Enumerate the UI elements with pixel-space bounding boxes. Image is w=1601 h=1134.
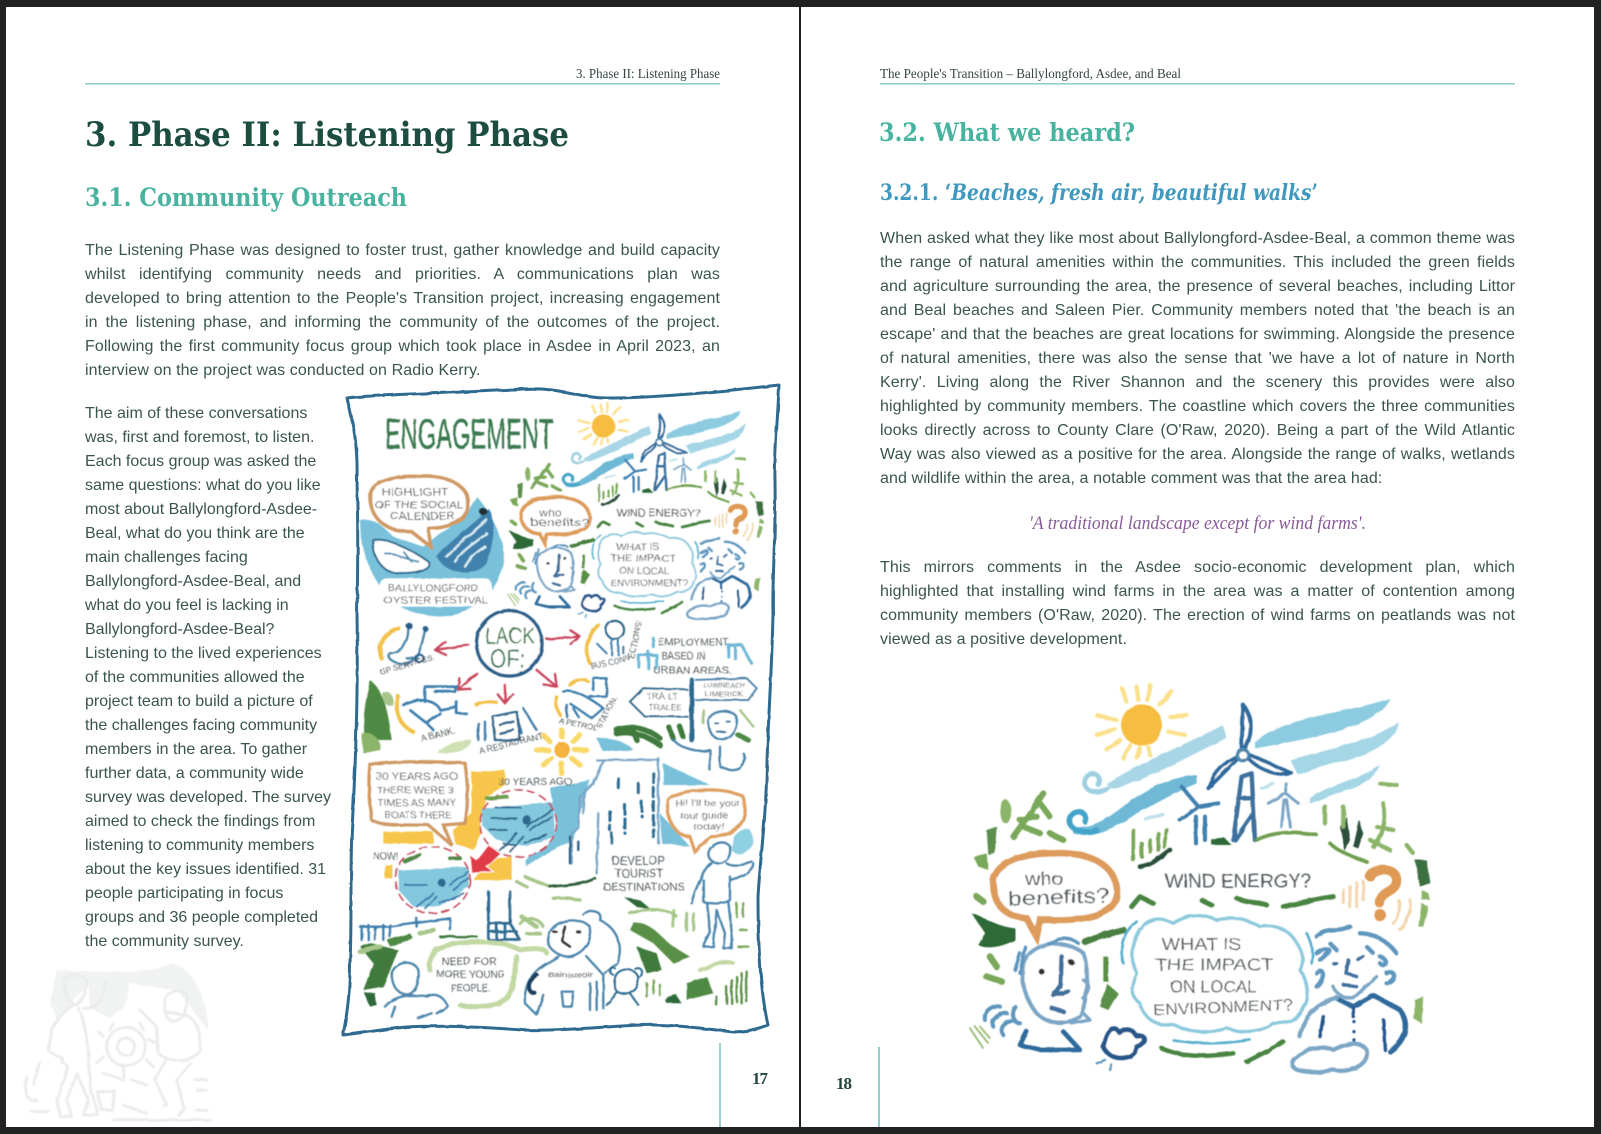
poster background washes — [360, 733, 753, 990]
employment in urban areas: EMPLOYMENT — [658, 638, 729, 649]
icon: bank — [364, 680, 467, 740]
tour guide figure — [692, 842, 753, 948]
oyster festival vignette: OF THE SOCIAL — [375, 499, 463, 511]
body column: aim of conversations: members in the area. To gather — [85, 741, 307, 758]
title: 3. Phase II: Listening Phase — [85, 115, 569, 155]
body paragraph: natural amenities: and Beal beaches and Saleen Pier. Community members noted that 'the beach is an — [880, 302, 1515, 319]
body paragraph: natural amenities: Kerry'. Living along the River Shannon and the scenery this provides were also — [880, 374, 1515, 391]
body column: aim of conversations: listening to community members — [85, 837, 314, 854]
pull quote: 'A traditional landscape except for wind farms'. — [1029, 514, 1366, 534]
thought cloud label: ENVIRONMENT? — [1153, 997, 1294, 1019]
thought cloud label: THE IMPACT — [1155, 955, 1273, 975]
body paragraph: listening phase: The Listening Phase was designed to foster trust, gather knowledge and build capacity — [85, 242, 720, 259]
upper wind energy vignette — [508, 404, 764, 619]
page header: left: 3. Phase II: Listening Phase — [576, 66, 720, 81]
body column: aim of conversations — [85, 405, 331, 950]
speech bubble: 30 years ago: TIMES AS MANY — [377, 798, 457, 809]
label: develop tourist destinations: TOURIST — [615, 866, 664, 880]
body column: aim of conversations: was, first and foremost, to listen. — [85, 429, 314, 446]
body paragraph: wind farms contention: viewed as a positive development. — [880, 631, 1127, 648]
poster upper half: WIND ENERGY? — [617, 508, 701, 520]
poster upper half: ENVIRONMENT? — [611, 578, 688, 588]
oyster festival vignette: BALLYLONGFORD — [388, 584, 478, 595]
speech bubble: tour guide: tour guide — [680, 810, 728, 820]
body paragraph: natural amenities — [880, 230, 1515, 487]
label: develop tourist destinations — [603, 853, 685, 894]
icon: bus connections: ECTIONS! — [626, 619, 644, 660]
body column: aim of conversations: The aim of these conversations — [85, 405, 307, 422]
body column: aim of conversations: aimed to check the findings from — [85, 813, 315, 830]
employment in urban areas: URBAN AREAS. — [653, 665, 732, 676]
heading: community outreach: 3.1. Community Outreach — [85, 183, 407, 212]
body paragraph: natural amenities: Way was also viewed as a positive for the area. Alongside the range of walks, wetlands — [880, 446, 1515, 463]
need more young people: NEED FOR — [442, 956, 497, 968]
page rule — [878, 1047, 880, 1127]
harbour and bridge — [360, 892, 520, 940]
icon: petrol station: STATION. — [594, 694, 619, 730]
body column: aim of conversations: Listening to the lived experiences — [85, 645, 322, 662]
then: dashed harbour scene — [480, 790, 557, 857]
icon: wind turbines — [1180, 705, 1298, 843]
bushes beside the signpost — [617, 727, 683, 740]
body column: aim of conversations: main challenges facing — [85, 549, 248, 566]
signpost person — [703, 710, 753, 739]
body paragraph: listening phase: developed to bring attention to the People's Transition project, increasing engagement — [85, 290, 720, 307]
body paragraph: natural amenities: of natural amenities, there was also the sense that 'we have a lot of nature in North — [880, 350, 1515, 367]
thought cloud label: WHAT IS — [1162, 934, 1242, 954]
poster upper half — [360, 404, 764, 740]
need more young people — [429, 942, 547, 1007]
thought cloud — [1122, 916, 1313, 1043]
icon: bus connections: BUS CONN — [590, 653, 631, 671]
body column: aim of conversations: Ballylongford-Asdee-Beal, and — [85, 573, 301, 590]
body paragraph: listening phase: whilst identifying community needs and priorities. A communications plan was — [85, 266, 720, 283]
body paragraph: natural amenities: escape' and that the beaches are great locations for swimming. Alongside the presence — [880, 326, 1515, 343]
signpost — [630, 678, 757, 740]
heading: beaches fresh air beautiful walks: 3.2.1. ‘Beaches, fresh air, beautiful walks’ — [880, 180, 1318, 206]
wind energy label: WIND ENERGY? — [1165, 871, 1312, 892]
body column: aim of conversations: about the key issues identified. 31 — [85, 861, 326, 878]
body paragraph: listening phase: interview on the project was conducted on Radio Kerry. — [85, 362, 481, 379]
icon: GP services stethoscope — [378, 623, 436, 677]
body column: aim of conversations: the community survey. — [85, 933, 244, 950]
speech bubble: tour guide — [668, 790, 745, 852]
employment in urban areas — [638, 638, 752, 676]
oyster festival vignette: HIGHLIGHT — [382, 487, 448, 499]
poster upper half: who — [538, 508, 562, 520]
left person — [985, 938, 1090, 1050]
red arrows — [435, 630, 580, 703]
icon: bus connections — [587, 619, 644, 671]
body column: aim of conversations: survey was developed. The survey — [85, 789, 331, 806]
poster frame — [343, 385, 779, 1035]
page number 18: 18 — [836, 1074, 851, 1093]
body column: aim of conversations: project team to build a picture of — [85, 693, 313, 710]
body column: aim of conversations: most about Ballylongford-Asdee- — [85, 501, 317, 518]
oyster festival vignette — [360, 476, 504, 616]
body column: aim of conversations: same questions: what do you like — [85, 477, 321, 494]
speech bubble: 30 years ago: 30 YEARS AGO — [376, 771, 458, 783]
speech bubble: 30 years ago: BOATS THERE — [385, 810, 452, 821]
signpost: LUIMNEACH — [703, 680, 745, 689]
signpost: LIMERICK — [705, 690, 743, 699]
speech bubble: tour guide: Hi! I'll be your — [675, 798, 740, 808]
body column: aim of conversations: what do you feel is lacking in — [85, 597, 289, 614]
body paragraph: wind farms contention — [880, 559, 1515, 648]
signpost: TRÁ LT — [647, 691, 678, 701]
referee figure — [525, 911, 620, 1015]
body paragraph: natural amenities: highlighted by community members. The coastline which covers the three communities — [880, 398, 1515, 415]
icon: sun — [1097, 685, 1187, 758]
label: develop tourist destinations: DEVELOP — [612, 853, 665, 868]
body column: aim of conversations: people participating in focus — [85, 885, 283, 902]
icon: petrol station: A PETROL — [558, 715, 599, 733]
body column: aim of conversations: Ballylongford-Asdee-Beal? — [85, 621, 274, 638]
green landscape patches — [360, 877, 748, 1007]
signpost: TRALEE — [648, 702, 682, 712]
icon: question mark — [1343, 870, 1410, 930]
thought cloud label: ON LOCAL — [1170, 977, 1257, 997]
restaurant label: A RESTAURANT. — [478, 730, 545, 756]
body paragraph: listening phase: Following the first community focus group which took place in Asdee in April 2023, an — [85, 338, 720, 355]
need more young people: PEOPLE. — [451, 983, 491, 995]
wind streaks — [1069, 698, 1398, 835]
body paragraph: wind farms contention: This mirrors comments in the Asdee socio-economic development plan, which — [880, 559, 1515, 576]
body paragraph: wind farms contention: community members (O'Raw, 2020). The erection of wind farms on peatlands was not — [880, 607, 1515, 624]
body paragraph: natural amenities: looks directly across to County Clare (O'Raw, 2020). Being a part of the Wild Atlantic — [880, 422, 1515, 439]
oyster festival vignette: CALENDER — [390, 510, 455, 522]
poster upper half: THE IMPACT — [611, 554, 676, 565]
poster upper half: WHAT IS — [616, 542, 659, 553]
youth figure left — [385, 963, 448, 1018]
lack of: central circle — [477, 611, 542, 676]
right person — [1292, 927, 1406, 1072]
body paragraph: natural amenities: the range of natural amenities within the communities. This included the green fields — [880, 254, 1515, 271]
now: dashed harbour scene: NOW! — [373, 851, 398, 862]
greenery — [970, 783, 1430, 1062]
page number 17: 17 — [752, 1069, 767, 1088]
heading: what we heard: 3.2. What we heard? — [879, 118, 1135, 147]
body paragraph: natural amenities: and wildlife within the area, a notable comment was that the area had: — [880, 470, 1382, 487]
speech bubble: 30 years ago — [369, 762, 467, 845]
body column: aim of conversations: groups and 36 people completed — [85, 909, 318, 926]
body paragraph: listening phase — [85, 242, 720, 379]
teddy figure — [607, 968, 642, 1005]
oyster festival vignette: OYSTER FESTIVAL — [383, 595, 489, 606]
label: 30 years ago: 30 YEARS AGO. — [498, 777, 575, 788]
who benefits label: who — [1024, 868, 1063, 889]
who benefits label: benefits? — [1008, 885, 1110, 911]
icon: sun — [537, 730, 587, 773]
employment in urban areas: BASED IN — [662, 650, 706, 662]
speech bubble: 30 years ago: THERE WERE 3 — [377, 785, 454, 796]
poster upper half: benefits? — [531, 517, 589, 529]
body paragraph: natural amenities: and agriculture surrounding the area, the presence of several beaches, including Littor — [880, 278, 1515, 295]
illustration: wind energy — [970, 685, 1430, 1072]
icon: restaurant menu — [477, 702, 537, 740]
bank label: A BANK. — [420, 725, 456, 744]
panel: left page — [6, 7, 799, 1127]
now: dashed harbour scene — [373, 847, 470, 913]
body column: aim of conversations: Each focus group was asked the — [85, 453, 316, 470]
castle — [570, 758, 658, 873]
body column: aim of conversations: Beal, what do you think are the — [85, 525, 305, 542]
watermark: two people with gear — [25, 963, 210, 1120]
body column: aim of conversations: the challenges facing community — [85, 717, 317, 734]
lack of: central circle: OF: — [490, 643, 525, 673]
body column: aim of conversations: further data, a community wide — [85, 765, 304, 782]
who benefits label — [1008, 868, 1110, 911]
icon: GP services stethoscope: GP SERVICES. — [378, 652, 436, 677]
speech bubble: who benefits — [993, 853, 1117, 937]
poster: engagement illustration — [343, 385, 779, 1035]
signpost figure arms and bushes — [617, 732, 748, 770]
label: develop tourist destinations: DESTINATIONS — [603, 882, 685, 894]
referee figure: Bainisteoir — [548, 970, 594, 979]
red arrow — [470, 845, 501, 873]
poster upper half: ON LOCAL — [619, 566, 670, 577]
icon: petrol station — [556, 678, 619, 733]
icon: dark blue flower hand — [1097, 1029, 1144, 1070]
lack of: central circle: LACK — [485, 622, 535, 648]
body paragraph: wind farms contention: highlighted that installing wind farms in the area was a matter of contention among — [880, 583, 1515, 600]
body paragraph: natural amenities: When asked what they like most about Ballylongford-Asdee-Beal, a common theme was — [880, 230, 1515, 247]
speech bubble: tour guide: today! — [693, 821, 725, 831]
body paragraph: listening phase: in the listening phase, and informing the community of the outcomes of the project. — [85, 314, 720, 331]
thought cloud label — [1153, 934, 1294, 1019]
body column: aim of conversations: of the communities allowed the — [85, 669, 305, 686]
need more young people: MORE YOUNG — [437, 970, 505, 981]
poster lower half — [360, 725, 753, 1018]
panel: right page — [801, 7, 1594, 1127]
page rule — [719, 1043, 721, 1127]
poster heading: engagement: ENGAGEMENT — [385, 410, 553, 458]
page header: right: The People's Transition – Ballylongford, Asdee, and Beal — [880, 66, 1181, 81]
